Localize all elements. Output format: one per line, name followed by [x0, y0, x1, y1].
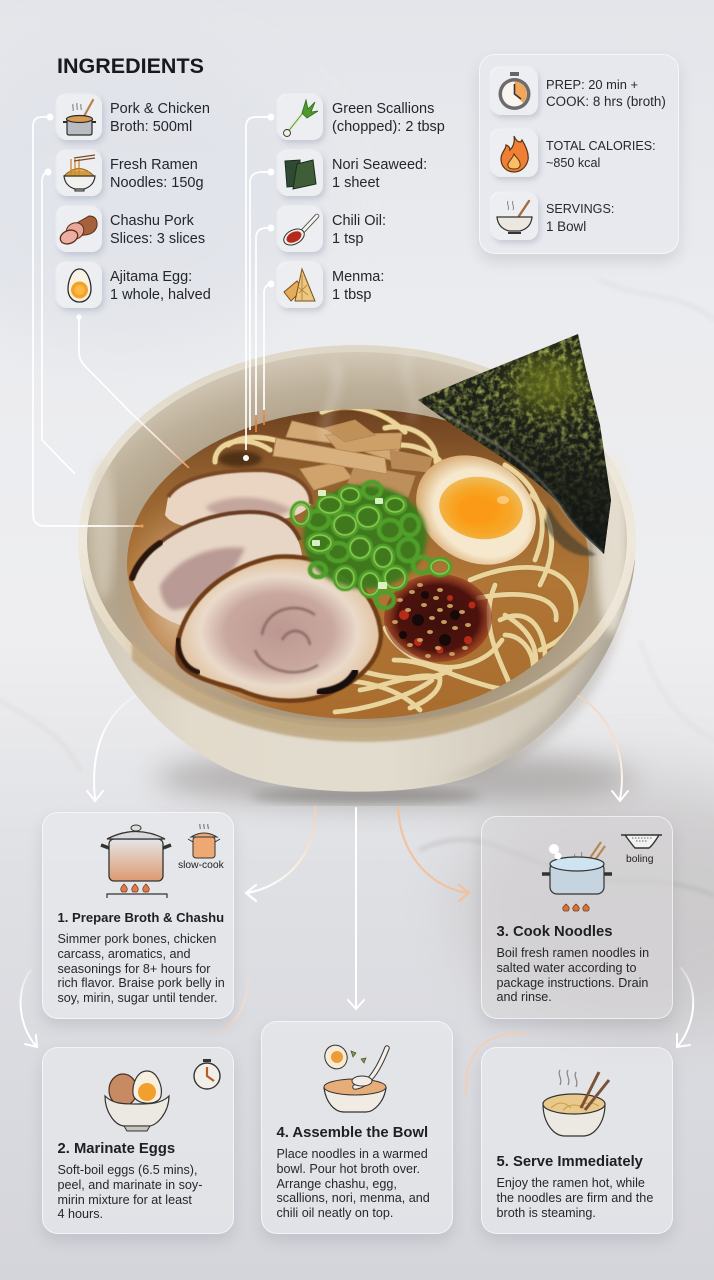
step 4 description: bowl. Pour hot broth over.	[276, 1162, 420, 1176]
boiling label: boling	[626, 854, 653, 865]
icon: chashu	[57, 207, 102, 252]
icon: nori sheets	[278, 151, 323, 196]
stat: servings	[490, 192, 614, 246]
step 1 description: soy, mirin, sugar until tender.	[58, 991, 218, 1005]
ingredient: pork and chicken broth	[56, 94, 210, 145]
step 2 description: Soft-boil eggs (6.5 mins),	[58, 1163, 198, 1177]
ingredient text	[332, 157, 427, 191]
step 4 description: Arrange chashu, egg,	[276, 1177, 397, 1191]
ingredient text: Chili Oil:	[332, 213, 386, 229]
step 3 description: Boil fresh ramen noodles in	[496, 946, 649, 960]
icon: steaming bowl	[491, 193, 538, 240]
step 2 heading: 2. Marinate Eggs	[58, 1141, 175, 1157]
ingredient text: Broth: 500ml	[110, 119, 192, 135]
main ramen bowl photo	[78, 334, 638, 821]
icon: flame	[491, 130, 538, 177]
ingredient text: Ajitama Egg:	[110, 269, 192, 285]
step 3 card	[481, 816, 673, 1019]
process arrows	[20, 695, 694, 1048]
chashu pork slice: middle	[131, 512, 302, 630]
step 1 heading: 1. Prepare Broth & Chashu	[58, 910, 224, 925]
icon: assembling bowl	[323, 1044, 390, 1113]
step 4 heading: 4. Assemble the Bowl	[276, 1125, 428, 1141]
chashu pork slice: front	[177, 557, 381, 701]
stat: prep and cook time	[490, 67, 666, 120]
connector: scallions	[243, 114, 274, 461]
slow-cook label: slow-cook	[178, 860, 224, 871]
icon: colander	[621, 834, 662, 849]
stat text	[546, 77, 666, 109]
ingredient: green scallions	[277, 94, 445, 145]
ingredient: nori seaweed	[277, 150, 427, 201]
bowl shadow	[155, 750, 635, 806]
step 4 description: Place noodles in a warmed	[276, 1147, 428, 1161]
arrow: step 3 to step 5	[677, 968, 693, 1047]
ingredient text: 1 tsp	[332, 231, 363, 247]
ingredient: ajitama egg	[56, 262, 211, 313]
bowl body	[80, 560, 635, 792]
ingredient: chashu pork slices	[56, 206, 205, 257]
step 3 description: package instructions. Drain	[496, 976, 648, 990]
menma bamboo shoots	[273, 420, 432, 497]
nori seaweed	[418, 334, 611, 556]
icon: small slow-cook pot	[188, 824, 220, 858]
icon: stopwatch	[193, 1059, 221, 1090]
arrow: step 4 to step 5 glow	[464, 1032, 525, 1096]
step 4 description: scallions, nori, menma, and	[276, 1191, 430, 1205]
stat text: TOTAL CALORIES:	[546, 139, 656, 153]
stat: total calories	[490, 129, 656, 182]
connector: noodles	[42, 169, 75, 474]
ajitama egg half	[396, 433, 556, 587]
panel: recipe stats	[479, 54, 679, 254]
bowl inner wall	[87, 352, 627, 728]
ingredient text	[110, 157, 204, 191]
stat text: COOK: 8 hrs (broth)	[546, 94, 666, 109]
connector: broth	[33, 114, 144, 528]
stat text	[546, 202, 614, 234]
connector: chili oil	[256, 225, 274, 432]
stat text: SERVINGS:	[546, 202, 614, 216]
step 5 description: broth is steaming.	[496, 1206, 596, 1220]
step 2 description: mirin mixture for at least	[58, 1193, 192, 1207]
step 2 description: peel, and marinate in soy-	[58, 1178, 202, 1192]
noodles	[215, 407, 576, 712]
step 1 description	[58, 932, 225, 1005]
ingredient text	[332, 269, 384, 303]
ingredient: chili oil	[277, 206, 386, 258]
arrow: bowl to step 3	[578, 696, 628, 801]
step 5 card	[481, 1047, 673, 1234]
arrow: bowl to step 1	[87, 696, 135, 801]
ingredient connector lines	[32, 114, 274, 528]
icon: stock pot on burner	[100, 824, 172, 898]
ingredient text: Slices: 3 slices	[110, 231, 205, 247]
green scallions	[292, 482, 450, 608]
connector: nori	[250, 169, 274, 430]
arrow: step 1 to step 2	[21, 970, 37, 1047]
chashu pork slice: back	[165, 470, 311, 528]
step 2 description	[58, 1163, 202, 1221]
step 4 description	[276, 1147, 430, 1220]
stat text: PREP: 20 min +	[546, 77, 638, 92]
icon: scallion	[278, 95, 323, 140]
ingredient text: Pork & Chicken	[110, 101, 210, 117]
arrow: to step 3 from center	[398, 807, 469, 901]
arrow: to step 1 from center	[246, 807, 315, 901]
title: INGREDIENTS	[57, 54, 204, 78]
step 2 card	[42, 1047, 234, 1234]
ingredient text: Noodles: 150g	[110, 175, 204, 191]
step 5 description: Enjoy the ramen hot, while	[496, 1176, 645, 1190]
ingredient text	[110, 269, 211, 303]
ingredient text: 1 whole, halved	[110, 287, 211, 303]
step 5 description	[496, 1176, 653, 1220]
ingredient: menma	[277, 262, 384, 314]
step 1 description: seasonings for 8+ hours for	[58, 962, 210, 976]
step 1 description: Simmer pork bones, chicken	[58, 932, 216, 946]
broth	[127, 409, 589, 719]
step 1 description: rich flavor. Braise pork belly in	[58, 976, 225, 990]
steam	[324, 350, 414, 440]
step 2 description: 4 hours.	[58, 1207, 103, 1221]
ingredient text: Fresh Ramen	[110, 157, 198, 173]
stat text: 1 Bowl	[546, 219, 586, 234]
ingredient text	[110, 101, 210, 135]
ingredient text	[332, 101, 445, 135]
ingredient text: Nori Seaweed:	[332, 157, 427, 173]
ingredient text: 1 sheet	[332, 175, 380, 191]
ingredient text: Green Scallions	[332, 101, 434, 117]
chili oil with sesame	[384, 574, 492, 662]
icon: serving bowl with chopsticks	[542, 1070, 610, 1137]
arrow: center down to step 4	[348, 808, 364, 1009]
icon: broth pot	[57, 95, 102, 140]
icon: egg	[57, 263, 102, 308]
step 1 description: carcass, aromatics, and	[58, 947, 190, 961]
icon: boiling pot	[542, 841, 612, 912]
stat text	[546, 139, 656, 170]
ingredient text: Chashu Pork	[110, 213, 194, 229]
ingredient text: Menma:	[332, 269, 384, 285]
icon: eggs in bowl	[104, 1070, 170, 1132]
bowl rim	[78, 345, 636, 737]
step 3 description: salted water according to	[496, 961, 637, 975]
step 3 description	[496, 946, 649, 1004]
step 5 description: the noodles are firm and the	[496, 1191, 653, 1205]
step 1 card	[42, 812, 234, 1019]
icon: bamboo shoots	[278, 263, 323, 308]
ingredient text: 1 tbsp	[332, 287, 372, 303]
icon: stopwatch	[491, 68, 538, 115]
icon: noodle bowl	[57, 151, 102, 196]
step 4 description: chili oil neatly on top.	[276, 1206, 393, 1220]
step 3 description: and rinse.	[496, 990, 552, 1004]
step 3 heading: 3. Cook Noodles	[496, 924, 612, 940]
step 4 card	[261, 1021, 453, 1234]
ingredient text	[332, 213, 386, 247]
stat text: ~850 kcal	[546, 156, 600, 170]
icon: spoon of chili oil	[278, 207, 323, 252]
ingredient text: (chopped): 2 tbsp	[332, 119, 445, 135]
connector: menma	[264, 281, 274, 425]
connector: egg	[76, 314, 189, 468]
step 5 heading: 5. Serve Immediately	[496, 1154, 643, 1170]
ingredient: fresh ramen noodles	[56, 150, 204, 201]
ingredient text	[110, 213, 205, 247]
arrow: step 1 to step 4 glow	[203, 968, 248, 1035]
